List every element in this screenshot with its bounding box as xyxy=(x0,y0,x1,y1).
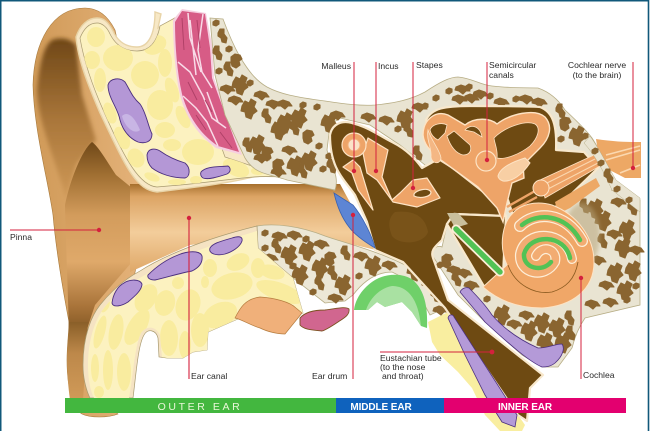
label: cochlea xyxy=(579,276,615,380)
bone lower-left xyxy=(257,225,445,315)
label: pinna xyxy=(10,228,101,242)
label: semicircular canals: canals xyxy=(489,70,514,80)
label: ear canal xyxy=(187,216,227,381)
malleus handle xyxy=(343,160,373,210)
skull bone xyxy=(210,18,640,367)
bone spur beside cavity xyxy=(447,213,468,228)
ampullae xyxy=(428,130,441,163)
fat cells xyxy=(84,27,265,185)
cochlea xyxy=(456,203,594,308)
green arch xyxy=(354,275,427,328)
pink gland xyxy=(300,308,349,331)
label: eustachian tube: and throat) xyxy=(382,371,424,381)
band: outer ear: OUTER EAR xyxy=(158,401,242,413)
malleus head xyxy=(342,133,366,157)
lower tissue xyxy=(83,226,307,398)
label: pinna: Pinna xyxy=(10,232,32,242)
label: cochlear nerve: (to the brain) xyxy=(573,70,621,80)
label: ear drum: Ear drum xyxy=(312,371,347,381)
spiral bands xyxy=(520,216,582,273)
bone texture xyxy=(213,20,644,353)
label: semicircular canals: Semicircular xyxy=(489,60,536,70)
middle ear cavity xyxy=(330,122,543,421)
label: incus: Incus xyxy=(378,61,399,71)
label: ear canal: Ear canal xyxy=(191,371,227,381)
label: incus xyxy=(374,61,399,173)
ear lobe xyxy=(67,322,88,400)
pinna xyxy=(33,8,150,417)
scala tube xyxy=(456,229,500,272)
label: stapes: Stapes xyxy=(416,60,443,70)
helix shadow xyxy=(37,38,96,200)
concha xyxy=(65,142,132,335)
purple vessels upper xyxy=(108,79,230,179)
band: middle ear xyxy=(336,398,444,413)
canal openings xyxy=(430,124,447,140)
label: ear drum xyxy=(312,213,355,381)
label: eustachian tube xyxy=(380,350,494,381)
label: cochlear nerve: Cochlear nerve xyxy=(568,60,626,70)
label: cochlear nerve xyxy=(568,60,635,170)
ear canal xyxy=(130,184,376,272)
lighter brown patches in cavity xyxy=(389,212,428,242)
purple vessels lower xyxy=(112,237,242,306)
ear drum xyxy=(334,193,375,248)
upper tissue: fat xyxy=(76,12,335,192)
inner ear cavity xyxy=(426,106,598,222)
semicircular canals xyxy=(423,113,550,222)
label: cochlea: Cochlea xyxy=(583,370,615,380)
label: semicircular canals xyxy=(485,60,536,162)
purple vessels inner xyxy=(448,288,563,427)
dark cavities xyxy=(330,106,598,421)
label: malleus: Malleus xyxy=(321,61,351,71)
band: inner ear: INNER EAR xyxy=(498,402,553,413)
band: middle ear: MIDDLE EAR xyxy=(350,402,412,413)
label: malleus xyxy=(321,61,356,173)
throat tissue xyxy=(428,312,525,431)
band: outer ear xyxy=(65,398,336,413)
label: stapes xyxy=(411,60,443,190)
incus and stapes xyxy=(363,138,440,207)
parotid gland xyxy=(235,297,302,334)
fat cells lower xyxy=(91,250,307,398)
cochlear nerve xyxy=(507,139,641,214)
bone strip over nerve xyxy=(584,136,640,212)
ossicles xyxy=(342,133,440,210)
band: inner ear xyxy=(444,398,626,413)
label: eustachian tube: (to the nose xyxy=(380,362,426,372)
label: eustachian tube: Eustachian tube xyxy=(380,353,442,363)
shade beside cochlea xyxy=(564,203,600,267)
muscle xyxy=(173,9,242,155)
